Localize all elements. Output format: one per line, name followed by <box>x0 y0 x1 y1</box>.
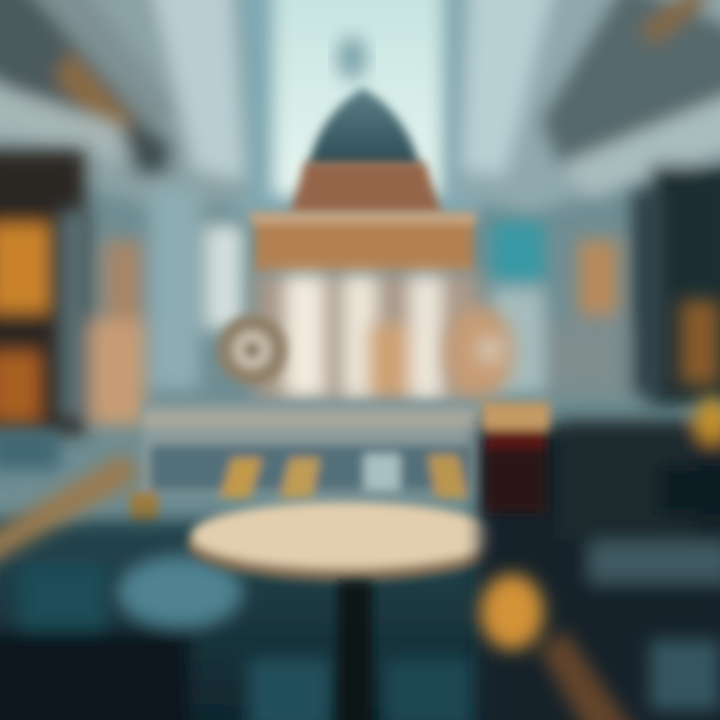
table top <box>187 502 503 581</box>
dome finial <box>337 36 367 80</box>
dome lower drum <box>290 162 442 215</box>
red cup <box>482 402 550 513</box>
left seating band <box>0 430 140 570</box>
right pillars <box>490 190 720 395</box>
entablature <box>250 212 476 272</box>
sky opening <box>232 0 482 215</box>
table leg <box>338 582 372 720</box>
left orange panel <box>0 150 85 435</box>
left pillars <box>58 190 243 425</box>
floor and lower seating <box>0 520 720 720</box>
dome <box>290 36 442 215</box>
dome upper <box>308 88 420 168</box>
right dark furniture <box>480 396 720 720</box>
right wheel ornament <box>446 306 514 398</box>
left upper building <box>0 0 252 210</box>
orange chair <box>480 574 720 720</box>
left wheel ornament <box>217 315 287 385</box>
columns <box>255 272 480 402</box>
right upper building <box>452 0 720 405</box>
balustrade <box>130 402 478 524</box>
